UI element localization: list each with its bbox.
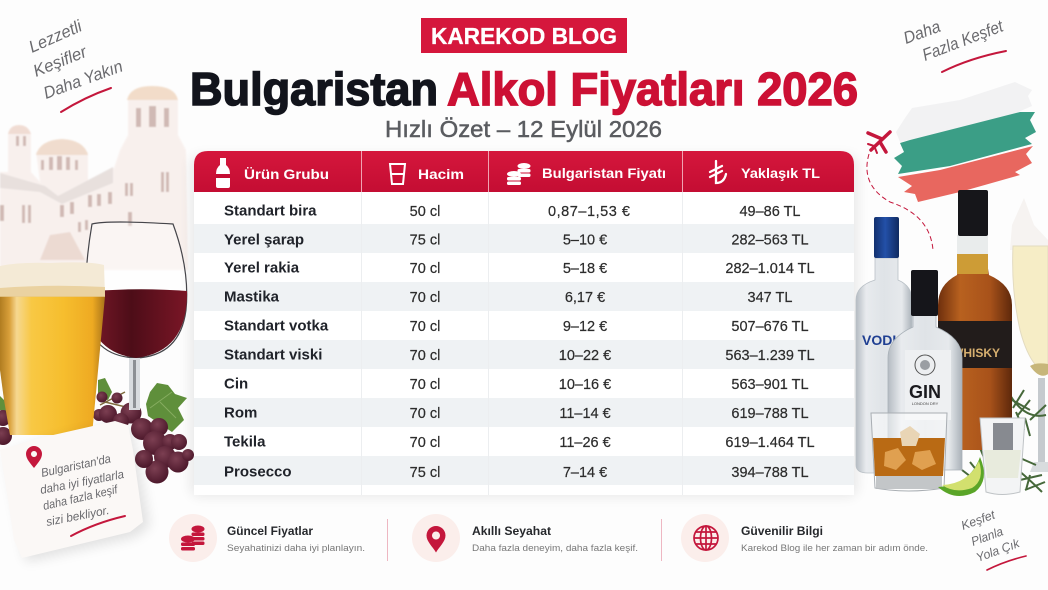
illustration: vodka bottle [856, 217, 913, 473]
row: Mastika: 70 cl [410, 290, 440, 306]
row: Yerel rakia: 5–18 € [563, 261, 607, 277]
row: Mastika [224, 288, 792, 306]
illustration: cathedral [0, 86, 188, 270]
icon: lira [710, 161, 726, 183]
feature: Güncel Fiyatlar: Seyahatinizi daha iyi planlayın. [227, 543, 365, 554]
row: Cin: Cin [224, 376, 248, 392]
handwritten note: bottom right: Planla [969, 524, 1005, 549]
row: Mastika: 347 TL [748, 290, 792, 306]
row: Standart viski: 70 cl [410, 348, 440, 364]
row: Yerel şarap: 282–563 TL [731, 232, 809, 248]
row: Cin [224, 376, 809, 393]
table header: Ürün Grubu [244, 166, 329, 182]
illustration: shot glass [980, 418, 1025, 494]
illustration: Bulgarian flag brush strokes [894, 82, 1036, 202]
illustration: grapes and leaves [0, 378, 194, 484]
feature: Güvenilir Bilgi: Güvenilir Bilgi [741, 524, 823, 538]
row: Standart bira: 0,87–1,53 € [548, 204, 630, 220]
row: Cin: 563–901 TL [731, 377, 809, 393]
table header [194, 151, 854, 192]
row: Standart votka: 507–676 TL [731, 319, 809, 335]
feature: Güvenilir Bilgi: Karekod Blog ile her zaman bir adım önde. [741, 543, 928, 554]
row: Standart votka: 9–12 € [563, 319, 607, 335]
row: Cin: 10–16 € [559, 377, 611, 393]
row: Standart bira: Standart bira [224, 202, 317, 220]
badge: Karekod Blog [421, 18, 627, 53]
row: Prosecco: 75 cl [410, 465, 440, 481]
callout: paper note: sizi bekliyor. [45, 503, 110, 529]
handwritten note: bottom right: Keşfet [959, 508, 997, 533]
row: Standart viski: 10–22 € [559, 348, 611, 364]
table header: Yaklaşık TL [741, 165, 820, 181]
row: Rom: 619–788 TL [731, 406, 809, 422]
feature: Güvenilir Bilgi [681, 514, 928, 562]
callout: paper note [0, 421, 150, 562]
callout: paper note: daha fazla keşif [42, 482, 120, 513]
row: Standart votka: 70 cl [410, 319, 440, 335]
feature: Akıllı Seyahat [412, 514, 638, 562]
handwritten note: top left [26, 16, 125, 112]
icon: bottle [216, 158, 230, 188]
icon: airplane [868, 132, 890, 153]
feature: Güncel Fiyatlar [169, 514, 365, 562]
badge: Karekod Blog: KAREKOD BLOG [431, 23, 617, 49]
illustration: gin bottle: GIN [909, 382, 941, 402]
row: Standart votka [224, 318, 809, 335]
icon: pin [426, 526, 446, 552]
icon: coins [181, 526, 204, 550]
panel: price table [190, 151, 858, 497]
illustration: whisky glass with ice [871, 413, 947, 491]
illustration: faint tower [1010, 198, 1048, 250]
row: Rom: Rom [224, 404, 257, 422]
illustration: gin bottle: LONDON DRY [912, 401, 939, 406]
icon: globe [694, 526, 718, 550]
callout: paper note: Bulgaristan'da [40, 451, 112, 480]
callout: paper note: daha iyi fiyatlarla [39, 467, 125, 497]
row: Yerel rakia: 70 cl [410, 261, 440, 277]
row: Tekila [224, 434, 815, 451]
handwritten note: top left: Daha Yakın [41, 57, 125, 103]
row: Mastika: 6,17 € [565, 290, 605, 306]
row: Standart viski: 563–1.239 TL [725, 348, 815, 364]
row: Rom: 11–14 € [559, 406, 611, 422]
icon: pin [26, 446, 42, 468]
row: Cin: 70 cl [410, 377, 440, 393]
row: Tekila: 619–1.464 TL [725, 435, 815, 451]
row: Prosecco [224, 464, 809, 481]
dashed flight path [867, 154, 933, 250]
handwritten note: bottom right [959, 508, 1026, 570]
row: Yerel rakia: 282–1.014 TL [725, 261, 815, 277]
row: Yerel rakia [224, 260, 815, 277]
row: Yerel rakia: Yerel rakia [224, 260, 300, 276]
illustration: vodka bottle: VODKA [862, 332, 913, 348]
row: Prosecco: Prosecco [224, 464, 292, 480]
row: Standart bira: 49–86 TL [739, 204, 801, 220]
row: Yerel şarap: 5–10 € [563, 232, 607, 248]
row: Standart bira [224, 202, 801, 220]
table header: Hacim [418, 166, 464, 182]
divider [387, 519, 388, 561]
feature: Güncel Fiyatlar: Güncel Fiyatlar [227, 524, 313, 538]
illustration: whisky bottle: WHISKY [952, 346, 1000, 360]
illustration: champagne glass [1013, 246, 1048, 472]
icon: coins [507, 163, 530, 185]
row: Rom [224, 404, 809, 422]
illustration: rosemary [960, 390, 1046, 492]
row: Standart viski [224, 346, 815, 364]
row: Tekila: 70 cl [410, 435, 440, 451]
handwritten note: bottom right: Yola Çık [974, 536, 1022, 565]
illustration: lime wedge [938, 457, 984, 496]
row: Yerel şarap: 75 cl [410, 232, 440, 248]
row: Rom: 70 cl [410, 406, 440, 422]
title: Alkol Fiyatları 2026 [447, 63, 858, 115]
handwritten note: top right: Daha [901, 17, 943, 48]
handwritten note: top right: Fazla Keşfet [920, 16, 1007, 65]
title: Bulgaristan [190, 63, 438, 115]
handwritten note: top left: Lezzetli [26, 16, 86, 57]
handwritten note: top left: Keşifler [30, 42, 91, 81]
divider [661, 519, 662, 561]
row: Yerel şarap [224, 232, 809, 248]
row: Prosecco: 7–14 € [563, 465, 607, 481]
illustration: wine glass [86, 222, 187, 410]
illustration: gin bottle [888, 270, 962, 470]
row: Tekila: 11–26 € [559, 435, 611, 451]
row: Standart votka: Standart votka [224, 318, 329, 334]
row: Prosecco: 394–788 TL [731, 465, 809, 481]
row: Yerel şarap: Yerel şarap [224, 232, 304, 248]
illustration: beer glass [0, 262, 105, 435]
row: Standart viski: Standart viski [224, 346, 322, 364]
feature: Akıllı Seyahat: Daha fazla deneyim, daha fazla keşif. [472, 543, 638, 554]
title [190, 63, 858, 115]
row: Standart bira: 50 cl [410, 204, 440, 220]
table body rows [194, 192, 854, 495]
row: Tekila: Tekila [224, 434, 266, 450]
icon: glass [390, 164, 405, 184]
row: Mastika: Mastika [224, 288, 280, 306]
table header: Bulgaristan Fiyatı [542, 165, 666, 181]
subtitle: Hızlı Özet – 12 Eylül 2026 [385, 116, 662, 142]
handwritten note: top right [901, 16, 1007, 72]
illustration: whisky bottle [938, 190, 1012, 450]
feature: Akıllı Seyahat: Akıllı Seyahat [472, 524, 551, 538]
